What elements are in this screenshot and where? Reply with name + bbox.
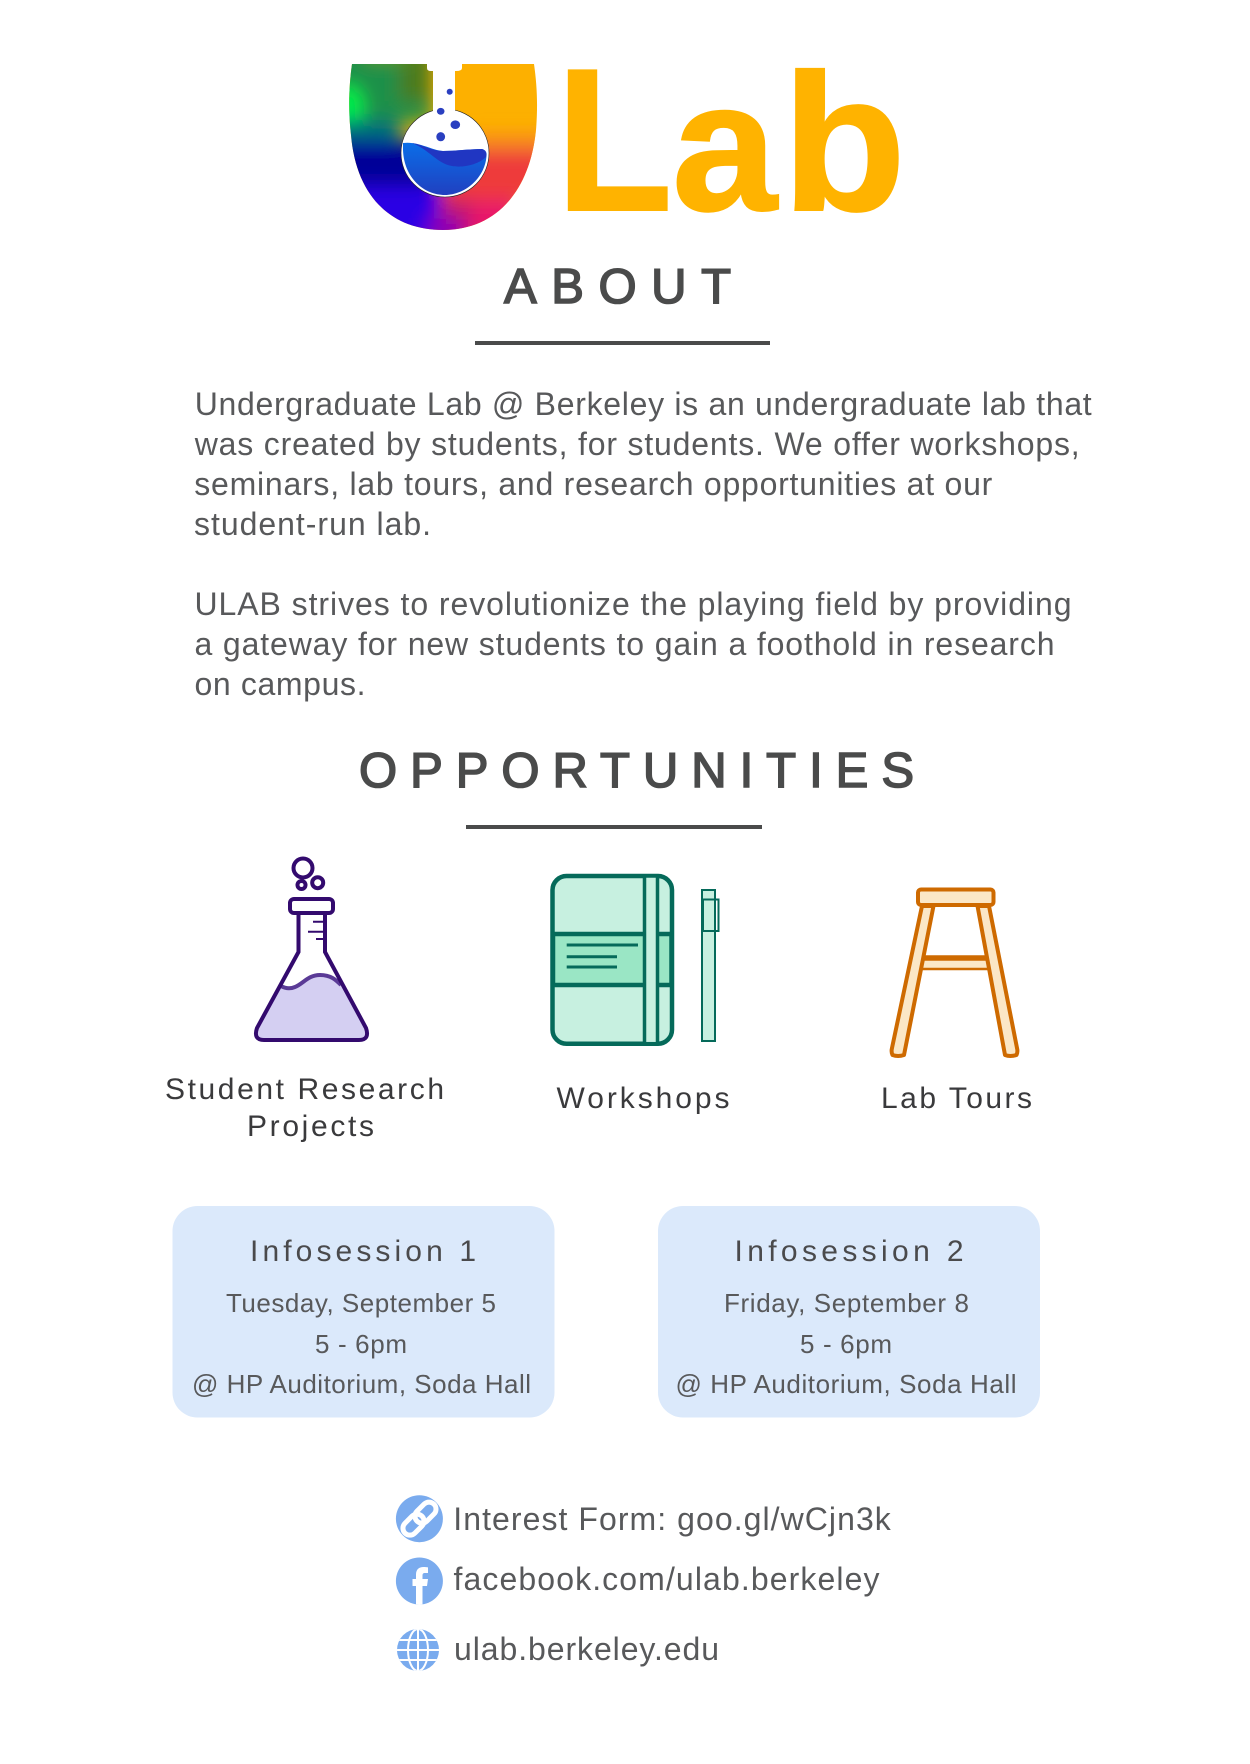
contact: interest form <box>396 1495 892 1542</box>
logo: Lab wordmark: L <box>556 27 673 253</box>
contact: facebook <box>396 1558 880 1606</box>
icon: link <box>396 1495 443 1542</box>
logo <box>349 64 899 230</box>
text block: about paragraphs: Undergraduate Lab @ Berkeley is an undergraduate lab that <box>195 386 1092 422</box>
label: lab tours: Lab Tours <box>881 1082 1032 1115</box>
contact: interest form: Interest Form: goo.gl/wCjn3k <box>453 1501 892 1537</box>
text block: about paragraphs: ULAB strives to revolutionize the playing field by providing <box>194 586 1072 622</box>
panel: infosession 2: Infosession 2 <box>734 1235 964 1268</box>
panel: infosession 2 <box>658 1206 1040 1418</box>
text block: about paragraphs: a gateway for new students to gain a foothold in research <box>194 626 1054 662</box>
text block: about paragraphs: seminars, lab tours, and research opportunities at our <box>194 466 993 502</box>
logo: flask silhouette <box>401 62 489 197</box>
label: student research projects <box>165 1073 444 1143</box>
heading: about: ABOUT <box>504 260 731 314</box>
divider: opportunities <box>466 825 762 829</box>
contact: facebook: facebook.com/ulab.berkeley <box>454 1561 880 1597</box>
label: student research projects: Projects <box>247 1110 374 1143</box>
text block: about paragraphs <box>194 386 1092 702</box>
panel: infosession 1: 5 - 6pm <box>315 1329 407 1359</box>
panel: infosession 2: Friday, September 8 <box>724 1288 969 1318</box>
icon: stool <box>892 890 1017 1056</box>
panel: infosession 1 <box>172 1206 554 1418</box>
text block: about paragraphs: on campus. <box>194 666 366 702</box>
icon: flask <box>256 858 367 1040</box>
contact: website: ulab.berkeley.edu <box>454 1631 719 1667</box>
heading: opportunities: OPPORTUNITIES <box>359 744 914 798</box>
logo: rainbow U <box>349 64 538 230</box>
divider: about <box>475 341 770 345</box>
panel: infosession 2: @ HP Auditorium, Soda Hall <box>676 1369 1016 1399</box>
text block: about paragraphs: student-run lab. <box>194 506 431 542</box>
icon: facebook <box>396 1558 443 1606</box>
logo: Lab wordmark: a <box>672 43 779 250</box>
panel: infosession 1: Tuesday, September 5 <box>226 1288 496 1318</box>
logo: Lab wordmark: b <box>782 35 906 252</box>
panel: infosession 1: @ HP Auditorium, Soda Hall <box>192 1369 531 1399</box>
label: workshops: Workshops <box>556 1082 730 1115</box>
logo: Lab wordmark <box>556 27 906 253</box>
infographic page <box>166 64 1092 1671</box>
panel: infosession 1: Infosession 1 <box>250 1235 476 1268</box>
icon: notebook and pen <box>552 876 718 1044</box>
text block: about paragraphs: was created by students, for students. We offer workshops, <box>194 426 1080 462</box>
icon: globe <box>397 1629 439 1671</box>
panel: infosession 2: 5 - 6pm <box>800 1329 892 1359</box>
label: student research projects: Student Research <box>165 1073 444 1106</box>
